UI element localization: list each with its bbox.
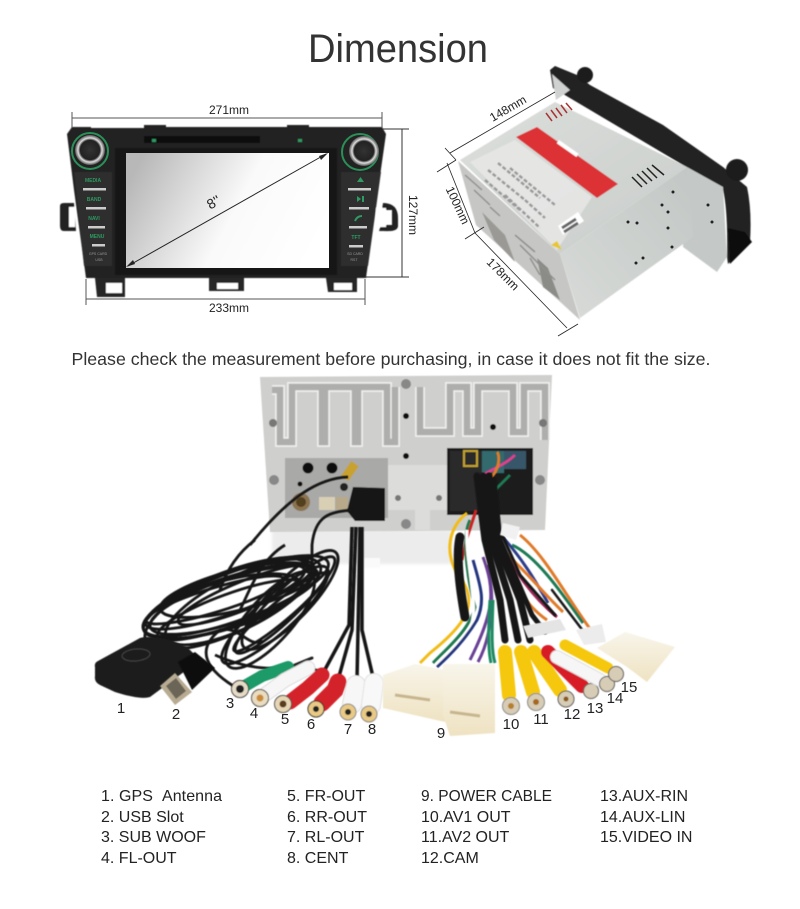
number labels: 10 — [503, 716, 519, 733]
legend column 4: 15.VIDEO IN — [600, 829, 692, 846]
title: Dimension — [308, 27, 488, 71]
legend column 1: 4. FL-OUT — [101, 850, 177, 867]
left buttons: NAVI — [88, 216, 100, 222]
panel: wiring photo — [95, 375, 675, 742]
left buttons: MENU — [90, 234, 105, 240]
RCA cable bundle — [322, 527, 373, 680]
left buttons: USB — [95, 258, 103, 262]
harness black trunk — [458, 476, 590, 640]
left buttons: GPS CARD — [89, 252, 108, 256]
legend column 1: 1. GPS Antenna — [101, 788, 222, 805]
number labels: 15 — [621, 679, 637, 696]
number labels: 5 — [281, 711, 289, 728]
legend column 4: 13.AUX-RIN — [600, 788, 688, 805]
right knob — [342, 134, 379, 170]
metal chassis — [458, 66, 752, 320]
head unit body — [60, 125, 398, 297]
legend column 2: 7. RL-OUT — [287, 829, 365, 846]
number labels — [117, 679, 637, 742]
left knob — [72, 133, 108, 169]
legend column 2: 5. FR-OUT — [287, 788, 365, 805]
legend column 2: 8. CENT — [287, 850, 349, 867]
GPS and USB cable coil — [134, 477, 352, 690]
wiring harness — [420, 452, 593, 667]
dimension: 271mm: 271mm — [209, 103, 249, 117]
number labels: 4 — [250, 705, 258, 722]
legend — [101, 788, 692, 867]
vent slots — [546, 103, 664, 187]
number labels: 12 — [564, 706, 580, 723]
icon: USB plug — [160, 652, 215, 705]
dimension: 100mm — [437, 160, 475, 233]
dimension: 148mm — [445, 92, 555, 160]
number labels: 11 — [533, 711, 549, 728]
wire tags — [500, 523, 606, 645]
legend column 3: 9. POWER CABLE — [421, 788, 552, 805]
RCA plugs 3 to 8 — [232, 658, 377, 722]
number labels: 14 — [607, 690, 623, 707]
legend column 2: 6. RR-OUT — [287, 809, 367, 826]
number labels: 13 — [587, 700, 603, 717]
legend column 3 — [421, 788, 552, 867]
dimension: 178mm: 178mm — [484, 255, 522, 293]
legend column 3: 12.CAM — [421, 850, 479, 867]
arrow: screen diagonal 8 inch — [126, 153, 328, 267]
number labels: 9 — [437, 725, 445, 742]
right buttons — [347, 177, 371, 262]
panel: front view of head unit — [60, 103, 420, 315]
number labels: 6 — [307, 716, 315, 733]
power connectors — [383, 632, 675, 736]
chassis screw holes — [626, 190, 714, 264]
label: 8 inch: 8'' — [204, 192, 223, 212]
dimension: 233mm: 233mm — [209, 301, 249, 315]
icon: GPS antenna — [95, 637, 200, 698]
right buttons: SD CARD — [347, 252, 363, 256]
left buttons: MEDIA — [85, 178, 101, 184]
legend column 1: 3. SUB WOOF — [101, 829, 206, 846]
legend column 4 — [600, 788, 692, 846]
number labels: 2 — [172, 706, 180, 723]
screen — [126, 153, 329, 268]
dimension: 127mm: 127mm — [406, 195, 420, 235]
legend column 3: 11.AV2 OUT — [421, 829, 510, 846]
right buttons: RST — [350, 258, 358, 262]
number labels: 8 — [368, 721, 376, 738]
RCA plugs 10 to 15 — [502, 645, 624, 714]
panel: rear 3D view of head unit — [437, 66, 752, 336]
right buttons: TFT — [351, 235, 361, 241]
legend column 2 — [287, 788, 367, 867]
left buttons: BAND — [87, 197, 102, 203]
legend column 1: 2. USB Slot — [101, 809, 184, 826]
table block under the unit — [272, 530, 452, 564]
dimension: 148mm: 148mm — [487, 92, 529, 125]
legend column 3: 10.AV1 OUT — [421, 809, 511, 826]
number labels: 7 — [344, 721, 352, 738]
dimension: 100mm: 100mm — [443, 184, 472, 226]
dimension: 178mm — [465, 227, 578, 336]
left buttons — [83, 178, 108, 262]
rear metal plate — [260, 375, 552, 568]
legend column 1 — [101, 788, 222, 867]
number labels: 1 — [117, 700, 125, 717]
number labels: 3 — [226, 695, 234, 712]
note text: Please check the measurement before purchasing, in case it does not fit the size. — [72, 349, 710, 369]
legend column 4: 14.AUX-LIN — [600, 809, 685, 826]
